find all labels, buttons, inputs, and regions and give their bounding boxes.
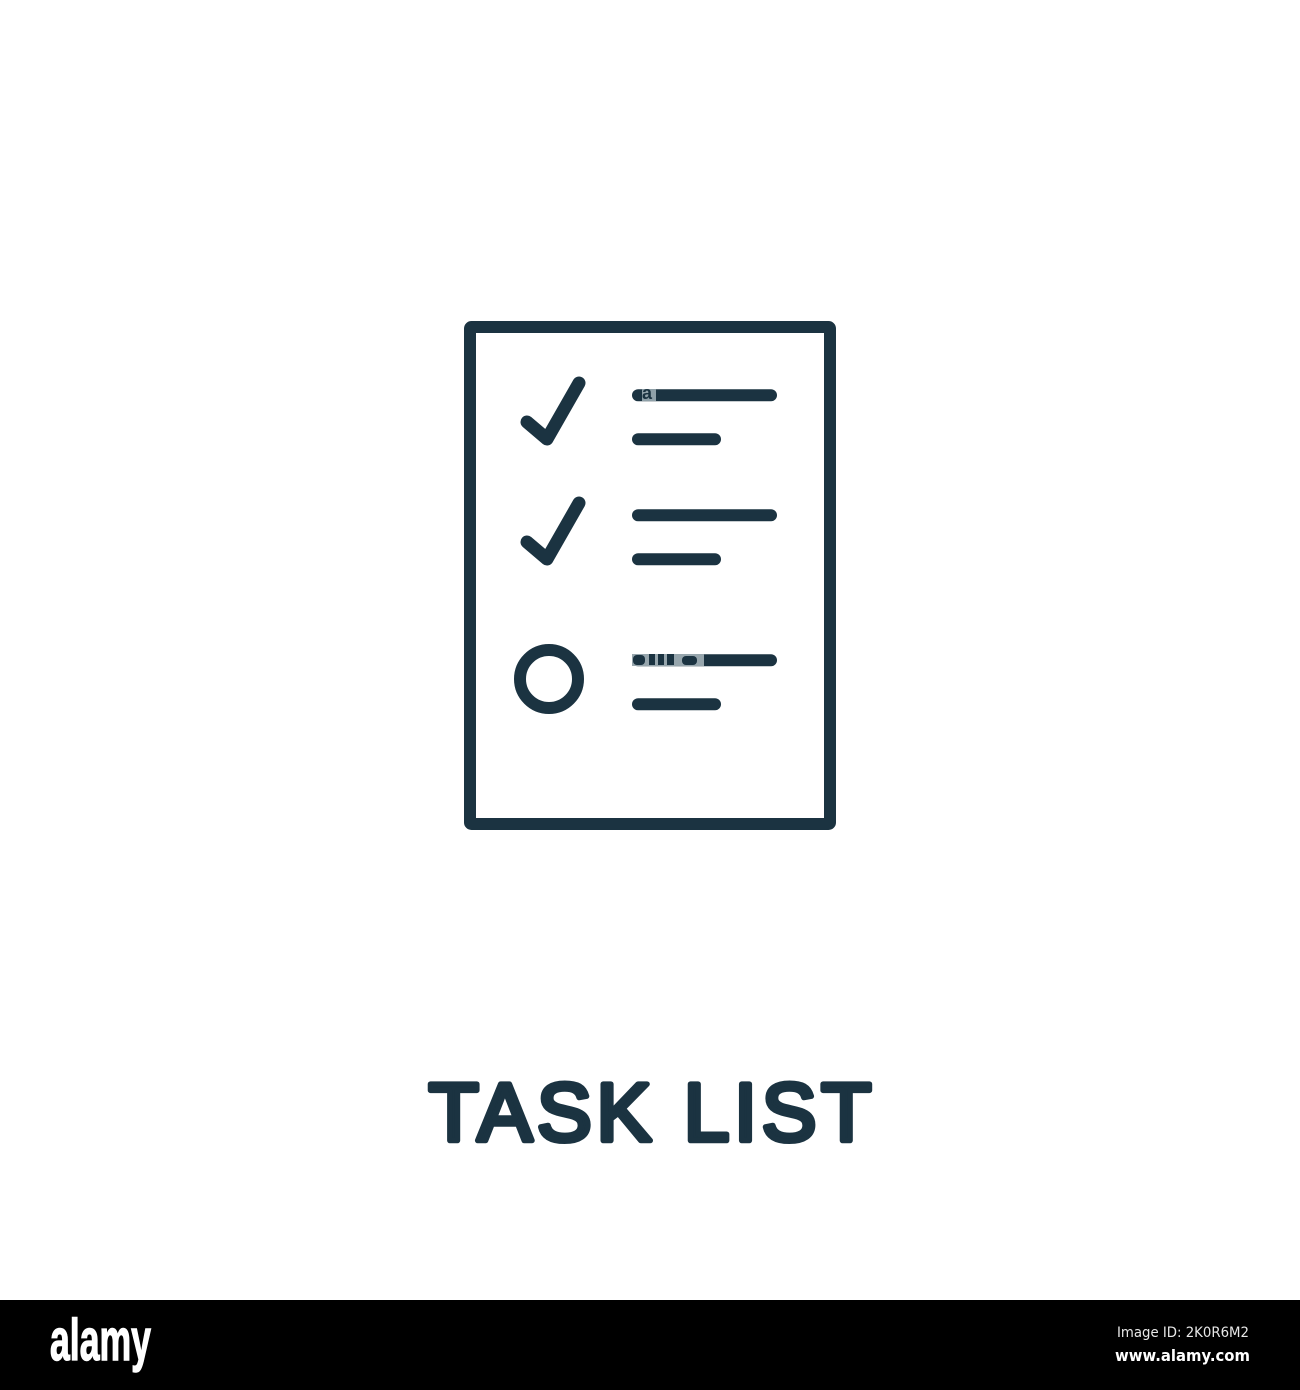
third task lines — [638, 660, 771, 704]
icon: task list document — [470, 327, 830, 824]
icon: empty circle — [520, 650, 578, 708]
icon: second check mark — [527, 503, 579, 559]
second task lines — [638, 515, 771, 559]
first task lines — [638, 395, 771, 439]
title: TASK LIST — [429, 1067, 871, 1158]
watermark fragment on first line — [642, 389, 656, 401]
infographic canvas — [0, 321, 1300, 1390]
website: www.alamy.com — [1115, 1346, 1250, 1365]
image id: Image ID: 2K0R6M2 — [1117, 1325, 1249, 1341]
footer logo: alamy — [50, 1308, 151, 1373]
footer bar — [0, 1300, 1300, 1390]
watermark fragment on first line: a — [642, 383, 653, 403]
icon: first check mark — [527, 383, 579, 439]
document outline — [470, 327, 830, 824]
watermark fragment on third line — [632, 654, 704, 666]
